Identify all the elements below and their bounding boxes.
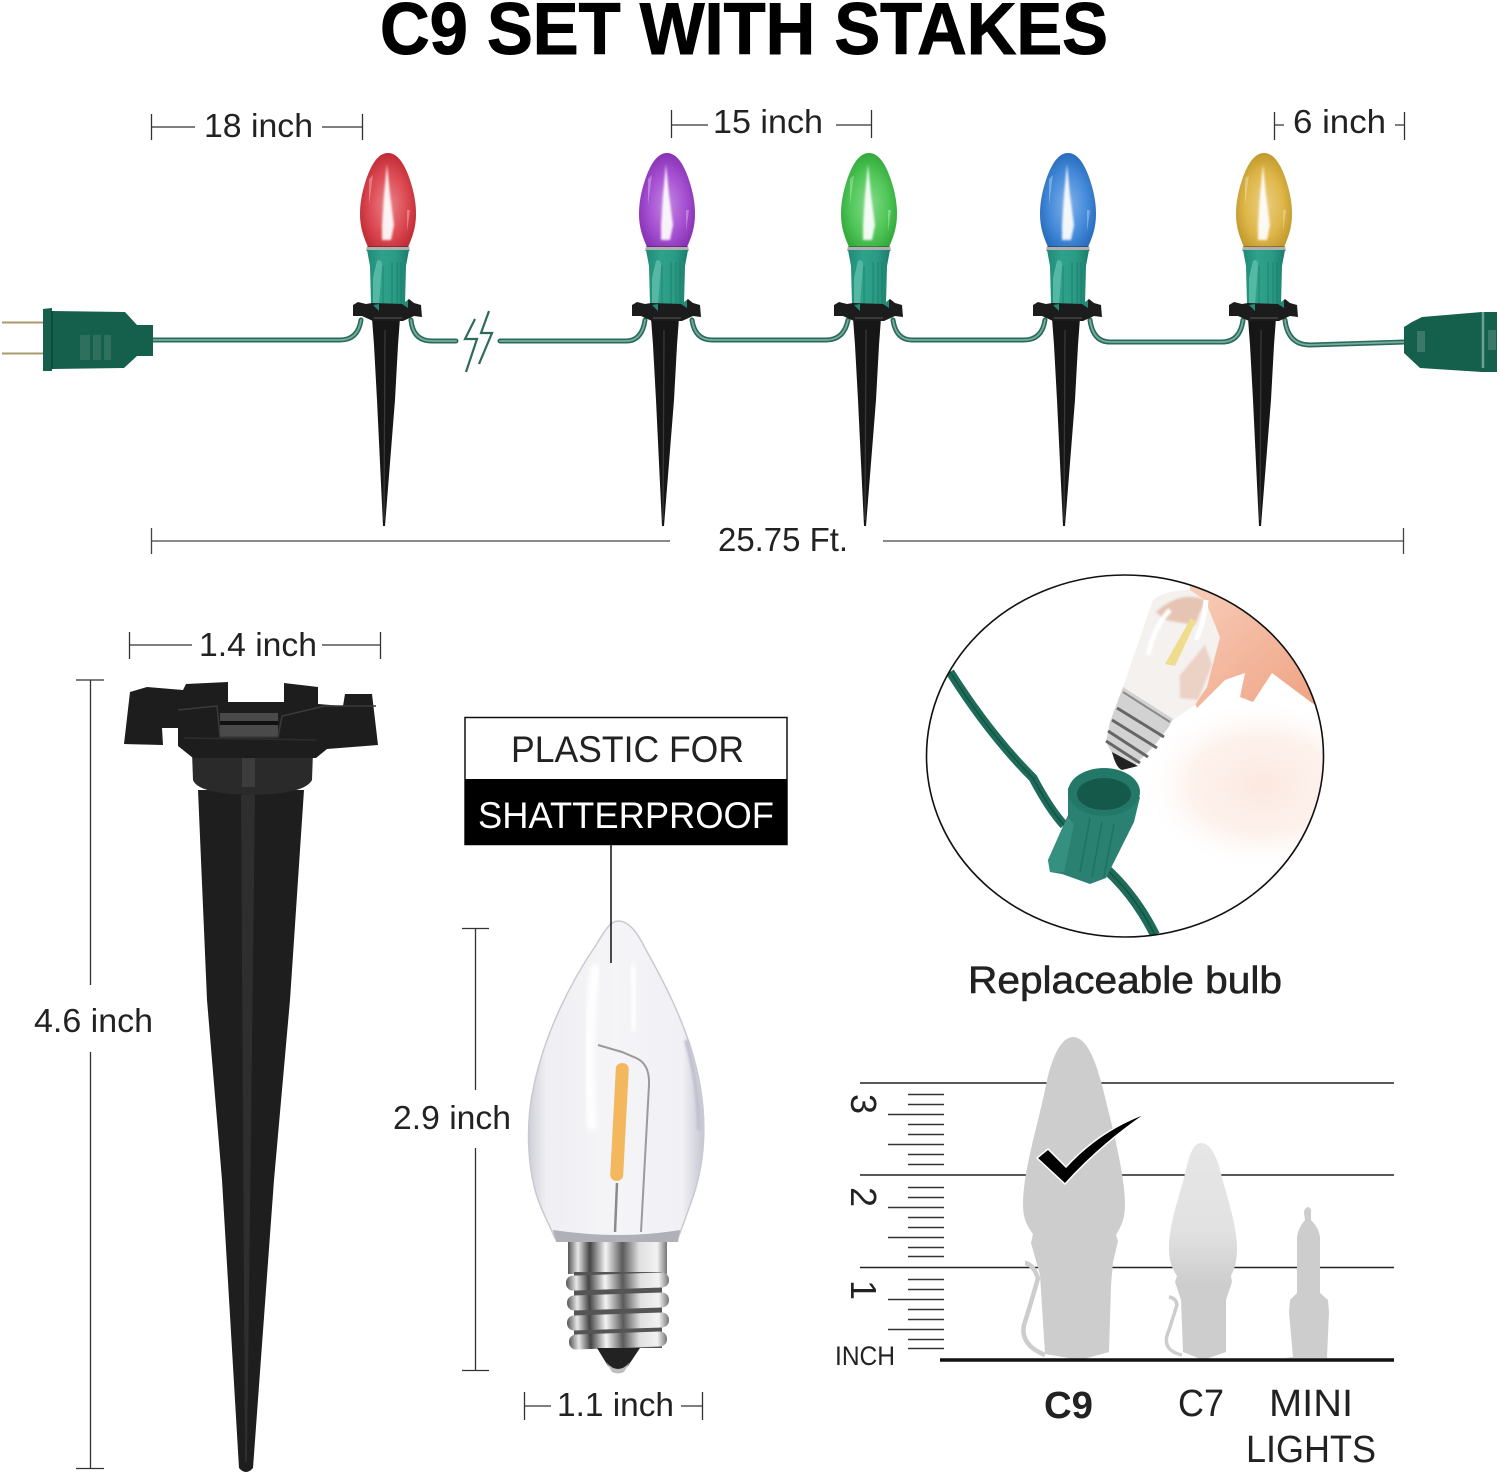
icon: red bulb on stake — [353, 153, 422, 526]
icon: check mark — [1037, 1113, 1147, 1184]
dimension: 1.1 inch: 1.1 inch — [557, 1386, 674, 1423]
label: mini lights — [1246, 1383, 1376, 1471]
dimension: 25.75 ft total length — [151, 521, 1404, 558]
dimension: 15 inch: 15 inch — [713, 103, 823, 140]
icon: yellow bulb on stake — [1229, 153, 1298, 526]
label: C7: C7 — [1178, 1383, 1224, 1425]
dimension: 18 inch — [151, 107, 362, 144]
icon: cable break symbol — [465, 311, 492, 372]
dimension: 1.4 inch: 1.4 inch — [199, 626, 317, 663]
panel: light string diagram — [2, 103, 1497, 558]
label: mini lights: LIGHTS — [1246, 1429, 1376, 1471]
callout: plastic for shatterproof: PLASTIC FOR — [511, 729, 744, 770]
dimension: 4.6 inch: 4.6 inch — [34, 1002, 153, 1039]
panel: shatterproof bulb — [393, 718, 787, 1423]
label: mini lights: MINI — [1269, 1383, 1353, 1425]
icon: ground stake — [124, 682, 378, 1472]
icon: clear LED bulb — [528, 921, 704, 1374]
callout: plastic for shatterproof — [465, 718, 787, 845]
icon: green bulb on stake — [834, 153, 903, 526]
baseline — [940, 1358, 1394, 1362]
dimension: 18 inch: 18 inch — [204, 107, 313, 144]
label: C9: C9 — [1044, 1385, 1093, 1427]
circle outline — [926, 575, 1324, 937]
dimension: 25.75 ft total length: 25.75 Ft. — [718, 521, 848, 558]
dimension: 1.1 inch — [524, 1386, 702, 1423]
dimension: 6 inch — [1274, 103, 1404, 140]
leader line — [610, 845, 612, 963]
dimension: 6 inch: 6 inch — [1293, 103, 1386, 140]
dimension: 2.9 inch: 2.9 inch — [393, 1099, 511, 1136]
dimension: 15 inch — [671, 103, 872, 140]
icon: female end connector — [1404, 312, 1497, 372]
ruler number 1: 1 — [843, 1280, 884, 1300]
silhouette: C7 bulb — [1166, 1143, 1237, 1360]
silhouette: mini light — [1285, 1207, 1329, 1358]
callout: plastic for shatterproof: SHATTERPROOF — [478, 795, 774, 836]
panel: replaceable bulb circle — [926, 574, 1324, 1002]
ruler unit label: INCH — [835, 1341, 895, 1371]
dimension: 2.9 inch — [393, 928, 511, 1370]
ruler number 2: 2 — [843, 1187, 884, 1207]
ruler number 3: 3 — [843, 1094, 884, 1114]
panel: stake detail — [34, 626, 380, 1472]
icon: purple bulb on stake — [632, 153, 701, 526]
panel: bulb size comparison chart — [835, 1037, 1394, 1471]
photo: hand replacing bulb — [948, 586, 1322, 935]
dimension: 4.6 inch — [34, 680, 153, 1468]
silhouette: C9 bulb — [1023, 1037, 1125, 1360]
wiring between stakes — [153, 320, 1404, 345]
icon: electrical plug — [2, 308, 153, 371]
ruler ticks — [888, 1094, 944, 1348]
dimension: 1.4 inch — [129, 626, 380, 663]
heading: replaceable bulb: Replaceable bulb — [968, 960, 1282, 1002]
icon: blue bulb on stake — [1033, 153, 1102, 526]
horizontal scale lines — [860, 1083, 1394, 1268]
